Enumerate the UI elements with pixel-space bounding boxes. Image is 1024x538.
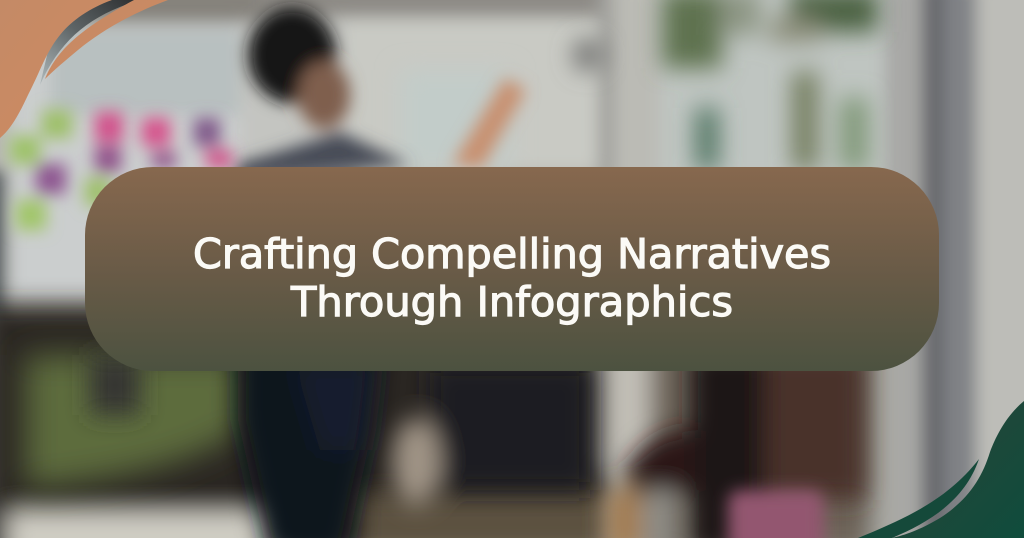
curtains [885,0,925,538]
lower left dark [0,305,610,538]
pillar [598,0,614,380]
floor [8,512,278,538]
decorative green corner wave [858,401,1024,538]
wall between boards [240,22,350,172]
soft tint on centre board [400,70,510,170]
title pill [85,167,939,371]
wall top [0,0,620,16]
knob [573,39,603,71]
whiteboard left [10,26,245,301]
dark group behind [90,355,590,506]
decorative orange corner wave [0,0,168,138]
sticky notes [10,110,232,230]
left dark edge [0,170,6,538]
lower right person [607,350,865,538]
whiteboard centre [345,20,600,170]
presenter body [238,175,385,538]
centre lower pillar [604,345,654,470]
title text [193,230,831,326]
title text: Through Infographics [290,278,733,326]
window foliage [573,0,878,170]
title text: Crafting Compelling Narratives [193,230,831,278]
couch [25,355,242,488]
window [660,0,892,180]
